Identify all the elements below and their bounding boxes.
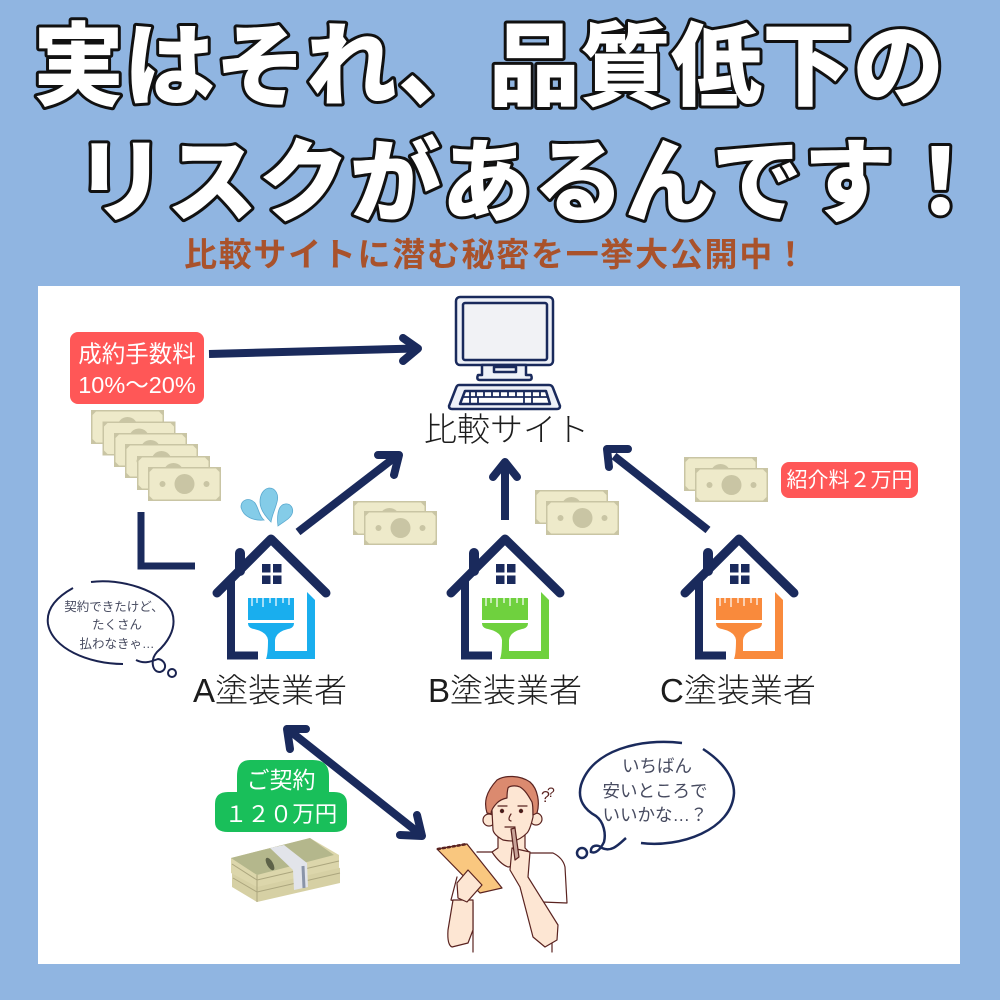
callout: commission bbox=[70, 332, 204, 404]
callout: contract price bbox=[215, 760, 347, 832]
pen bbox=[511, 828, 519, 860]
thought bubble: A contractor bbox=[48, 581, 176, 677]
title: 実はそれ、品質低下の bbox=[33, 17, 944, 118]
label: B contractor: B塗装業者 bbox=[428, 672, 582, 709]
icon: house B bbox=[451, 539, 560, 659]
panel: diagram bbox=[38, 286, 960, 964]
thought bubble: A contractor: 払わなきゃ… bbox=[79, 637, 155, 651]
face detail bbox=[498, 806, 527, 827]
hair bbox=[486, 776, 538, 815]
icon: bills B bbox=[535, 490, 619, 535]
callout: commission: 成約手数料 bbox=[78, 341, 196, 367]
arrow: C to site bbox=[607, 449, 708, 530]
face bbox=[491, 782, 533, 841]
callout: referral fee bbox=[781, 462, 918, 498]
icon: computer bbox=[449, 297, 560, 409]
connector line bbox=[141, 512, 195, 566]
notepad bbox=[437, 844, 502, 893]
illustration: thinking person bbox=[437, 776, 567, 960]
callout: contract price: ご契約 bbox=[246, 767, 316, 793]
thought bubble: customer bbox=[577, 742, 734, 858]
icon: sweat drops bbox=[241, 488, 293, 526]
icon: bills C bbox=[684, 457, 768, 502]
arrow: contractor and customer contract bbox=[287, 729, 422, 836]
icon: house C bbox=[685, 539, 794, 659]
title: リスクがあるんです！ bbox=[75, 133, 986, 234]
body shirt bbox=[451, 852, 567, 960]
callout: commission: 10%～20% bbox=[78, 372, 196, 398]
label: 比較サイト: 比較サイト bbox=[424, 411, 589, 448]
thought bubble: customer: 安いところで bbox=[602, 781, 708, 801]
icon: stack of bills bbox=[91, 410, 221, 501]
arrow: commission to site bbox=[209, 338, 418, 361]
thought bubble: customer: いいかな…？ bbox=[602, 805, 708, 825]
label: C contractor: C塗装業者 bbox=[660, 672, 816, 709]
callout: referral fee: 紹介料２万円 bbox=[786, 469, 912, 492]
arrow: A to site bbox=[298, 455, 399, 532]
question marks: ? bbox=[541, 789, 550, 806]
raised arm bbox=[510, 848, 558, 947]
title bbox=[33, 17, 986, 234]
neck bbox=[492, 831, 530, 867]
subtitle: 比較サイトに潜む秘密を一挙大公開中！ bbox=[184, 236, 809, 273]
illustration: thinking person: ? bbox=[547, 784, 555, 800]
icon: stack of cash bbox=[231, 838, 340, 902]
label: A contractor: A塗装業者 bbox=[193, 672, 347, 709]
callout: contract price: １２０万円 bbox=[225, 802, 337, 827]
left hand bbox=[457, 870, 482, 902]
thought bubble: A contractor: 契約できたけど、 bbox=[64, 599, 164, 614]
icon: bills A bbox=[353, 501, 437, 545]
icon: house A bbox=[217, 539, 326, 659]
thought bubble: customer: いちばん bbox=[622, 756, 692, 776]
arrow: B to site bbox=[493, 462, 517, 520]
left arm bbox=[448, 900, 473, 947]
ears bbox=[483, 814, 495, 826]
thought bubble: A contractor: たくさん bbox=[92, 618, 142, 632]
